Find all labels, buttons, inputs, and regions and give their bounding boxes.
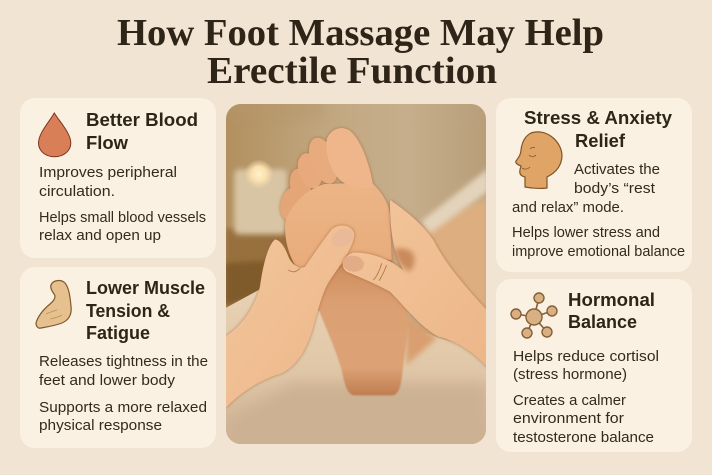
panel: better blood flow: [20, 98, 216, 258]
text: hormonal benefits: Creates a calmer: [513, 393, 626, 409]
heel: [318, 257, 408, 395]
panel: lower muscle tension and fatigue: [20, 267, 216, 448]
heading: better blood flow: Better Blood: [86, 110, 198, 130]
left hand: [225, 226, 354, 408]
text: stress benefits: Helps lower stress and: [512, 225, 660, 241]
heading: better blood flow: [86, 110, 198, 153]
heading: lower muscle tension: Lower Muscle: [86, 278, 205, 298]
title: How Foot Massage May Help: [117, 12, 604, 54]
heading: lower muscle tension: Tension &: [86, 301, 170, 321]
text: hormonal benefits: [513, 349, 659, 446]
heading: hormonal balance: Hormonal: [568, 290, 655, 310]
text: muscle benefits: [39, 354, 208, 434]
heading: lower muscle tension: [86, 278, 205, 343]
text: blood flow benefits: relax and open up: [39, 228, 161, 244]
icon: flexed arm: [36, 281, 71, 328]
text: stress benefits: improve emotional balance: [512, 244, 685, 260]
panel: stress and anxiety relief: [496, 98, 692, 272]
title: Erectile Function: [207, 50, 497, 92]
text: muscle benefits: feet and lower body: [39, 373, 176, 389]
text: blood flow benefits: circulation.: [39, 184, 115, 200]
text: stress benefits: and relax” mode.: [512, 200, 624, 216]
text: hormonal benefits: (stress hormone): [513, 367, 627, 383]
heading: better blood flow: Flow: [86, 133, 129, 153]
text: stress benefits: body’s “rest: [574, 181, 655, 197]
text: muscle benefits: physical response: [39, 418, 162, 434]
heading: stress and anxiety relief: Relief: [575, 131, 626, 151]
text: muscle benefits: Supports a more relaxed: [39, 400, 207, 416]
text: blood flow benefits: Helps small blood vessels: [39, 210, 206, 226]
heading: lower muscle tension: Fatigue: [86, 323, 150, 343]
text: muscle benefits: Releases tightness in the: [39, 354, 208, 370]
text: blood flow benefits: Improves peripheral: [39, 165, 177, 181]
text: hormonal benefits: environment for: [513, 411, 624, 427]
text: hormonal benefits: Helps reduce cortisol: [513, 349, 659, 365]
right hand: [343, 200, 488, 368]
text: stress benefits: [512, 162, 685, 260]
heading: hormonal balance: Balance: [568, 312, 637, 332]
heading: stress and anxiety relief: Stress & Anxiety: [524, 108, 672, 128]
heading: stress and anxiety relief: [524, 108, 672, 151]
text: hormonal benefits: testosterone balance: [513, 430, 654, 446]
text: blood flow benefits: [39, 165, 206, 244]
heading: hormonal balance: [568, 290, 655, 332]
title: [117, 12, 604, 92]
text: stress benefits: Activates the: [574, 162, 660, 178]
icon: calm head profile: [516, 132, 562, 188]
icon: blood drop: [38, 113, 71, 157]
icon: molecule network: [511, 293, 557, 338]
panel: hormonal balance: [496, 279, 692, 452]
toes and sole: [277, 128, 392, 280]
photo: reflexology foot massage: [225, 97, 488, 450]
